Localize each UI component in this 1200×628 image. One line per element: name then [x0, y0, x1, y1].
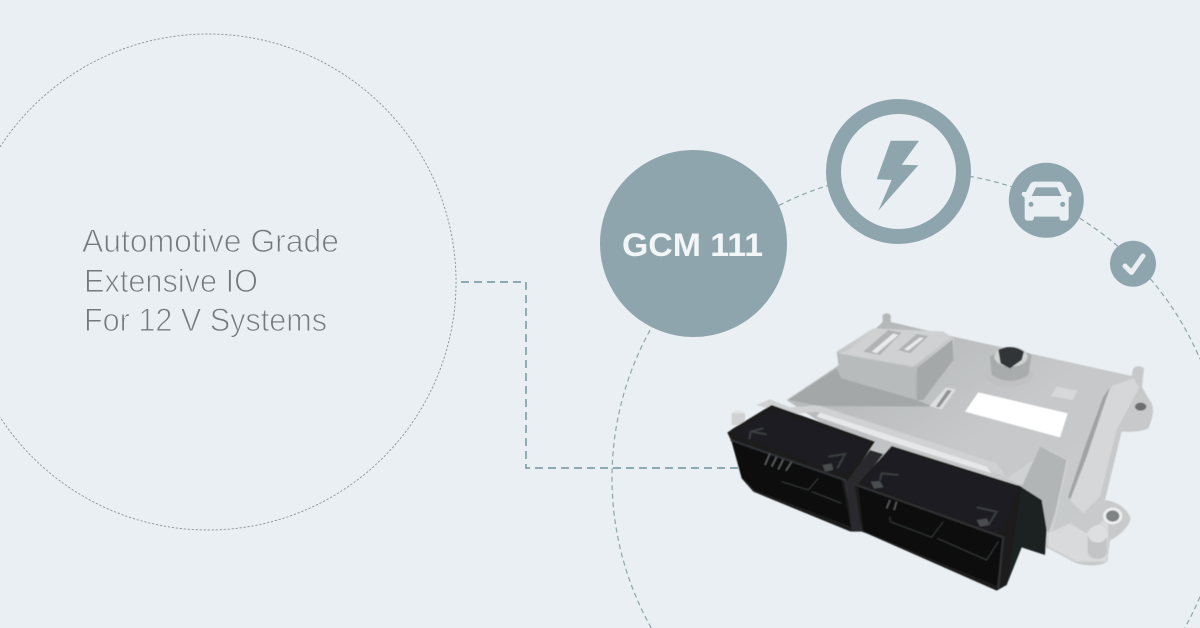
- left lug post: [732, 410, 745, 416]
- raised edge near connectors: [757, 399, 1068, 547]
- icon: lightning bolt ring: [834, 106, 964, 236]
- badge: GCM 111: [600, 150, 787, 337]
- top-left plate shade: [788, 368, 933, 407]
- badge: GCM 111: GCM 111: [622, 227, 763, 263]
- dashed circle: left: [0, 34, 456, 530]
- product photo: engine control unit: [727, 313, 1153, 591]
- icon: car: [1009, 163, 1084, 238]
- side rail: [1070, 378, 1139, 513]
- right connector: [855, 446, 1022, 591]
- icon: check mark: [1110, 241, 1156, 287]
- text block: features: For 12 V Systems: [84, 302, 327, 338]
- mounting lugs and base plate: [787, 313, 1153, 565]
- text block: features: Automotive Grade: [82, 223, 339, 259]
- white label: [965, 392, 1068, 437]
- gap between connectors: [847, 450, 883, 532]
- text block: features: Extensive IO: [84, 263, 258, 299]
- connector knob: [985, 363, 1033, 387]
- raised cover: [837, 328, 954, 400]
- mounting holes: [1103, 508, 1122, 524]
- corner boss: [1048, 517, 1108, 562]
- left connector: [727, 405, 875, 532]
- small slots: [929, 387, 956, 409]
- right connector flange: [1000, 485, 1047, 587]
- text block: features: [82, 223, 339, 338]
- dashed circle: right orbit: [612, 172, 1200, 628]
- dashed connector: [461, 282, 740, 468]
